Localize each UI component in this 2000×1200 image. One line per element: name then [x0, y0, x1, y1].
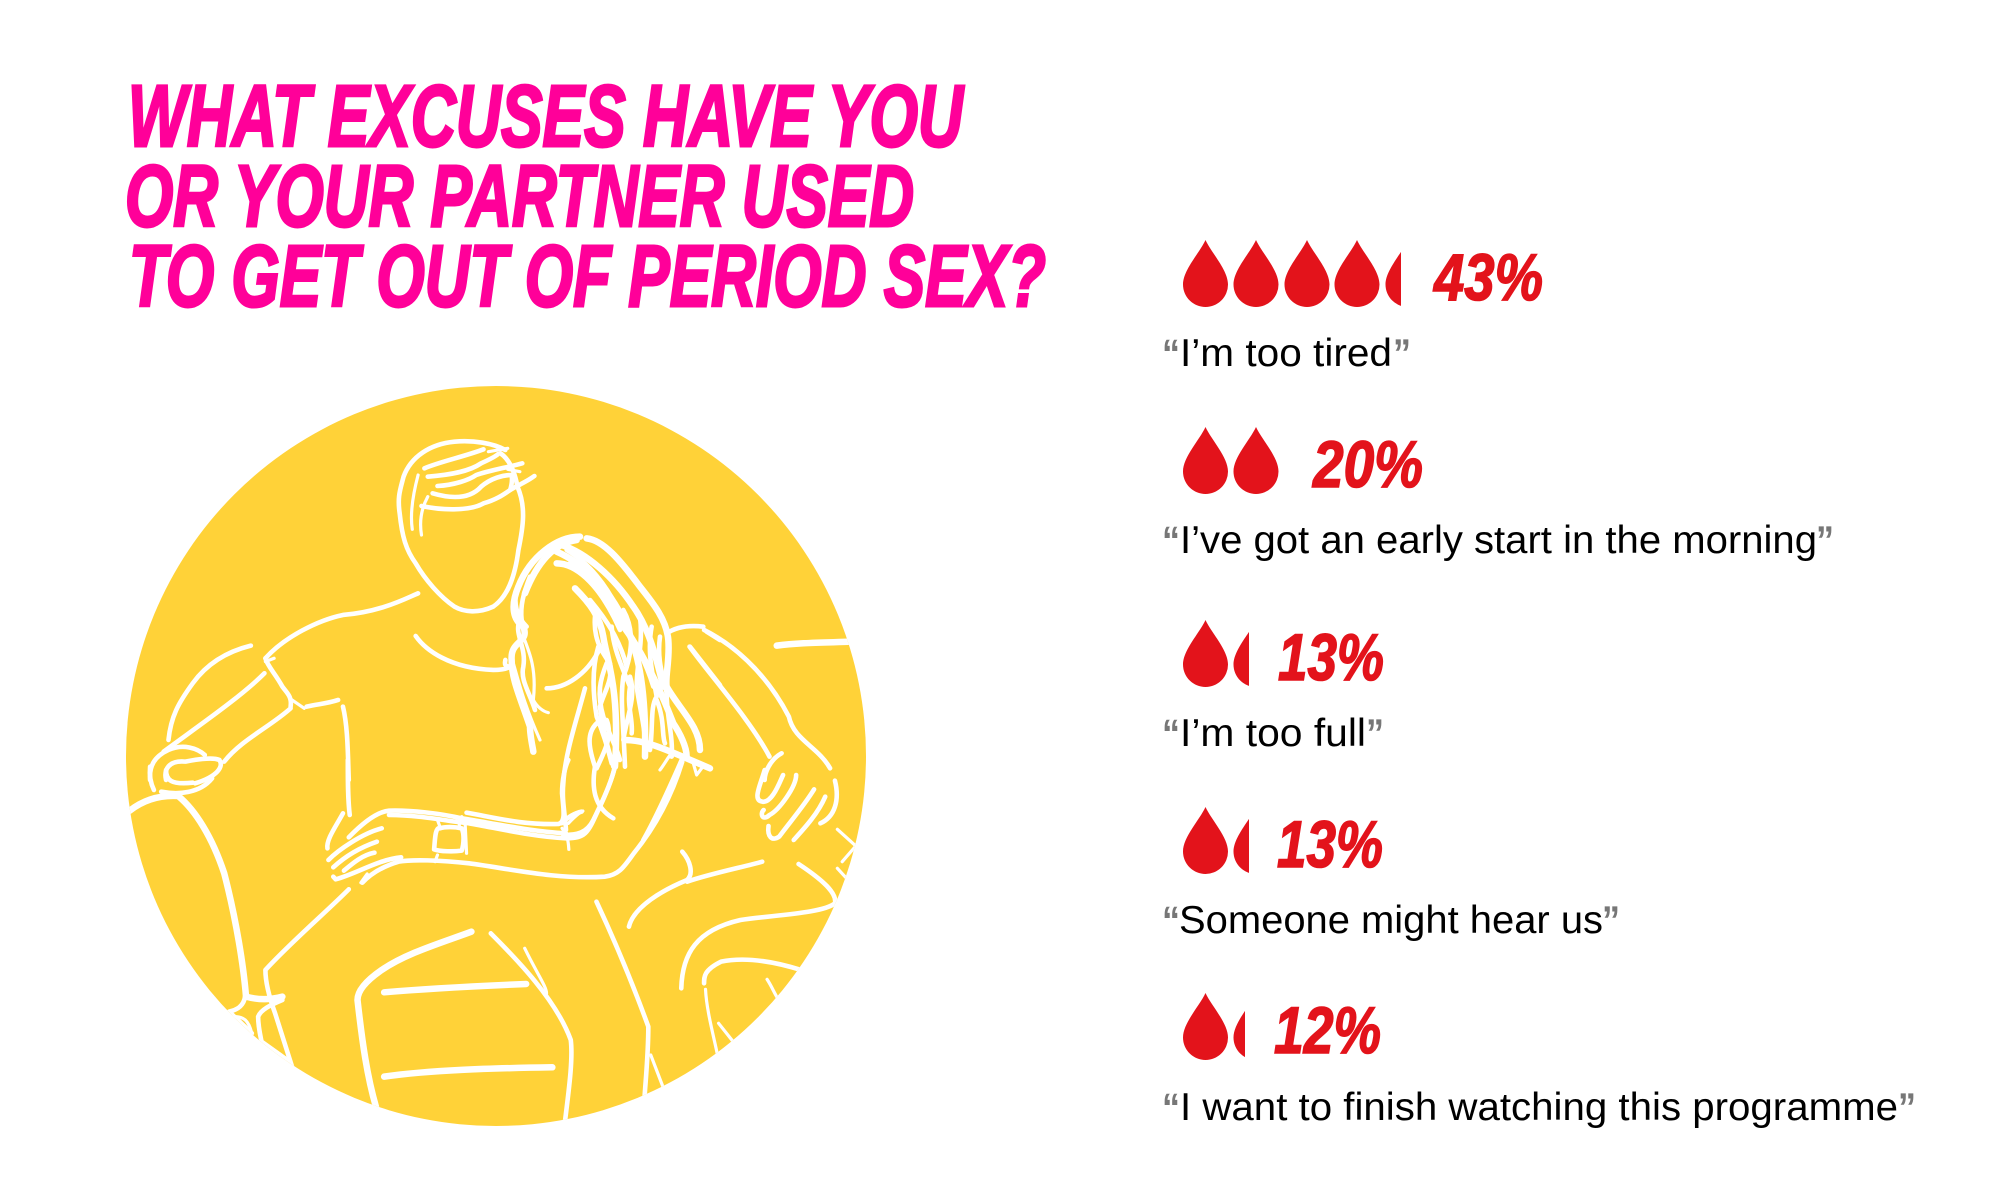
quote: I'm too tired: I’m too tired [1180, 332, 1392, 375]
quote: early start: ” [1816, 519, 1834, 563]
row: I'm too tired 43% [1162, 240, 1543, 376]
row: early start 20% [1162, 427, 1834, 563]
quote: early start: “ [1162, 519, 1180, 563]
quote: finish watching: I want to finish watching this programme [1180, 1086, 1898, 1129]
title: TO GET OUT OF PERIOD SEX? [129, 228, 1046, 325]
quote: too full: ” [1366, 712, 1384, 756]
percentage: 12%: 12% [1274, 993, 1381, 1067]
icon: 4.3 blood drops [1183, 240, 1401, 307]
percentage: 20%: 20% [1311, 427, 1423, 501]
line art: woman's hair [512, 537, 720, 840]
row: I'm too full 13% [1162, 620, 1384, 756]
percentage: 13%: 13% [1277, 807, 1383, 881]
quote: I'm too tired: ” [1393, 332, 1411, 376]
icon: 2 blood drops [1183, 427, 1278, 494]
quote: early start: I’ve got an early start in the morning [1180, 519, 1817, 562]
percentage: 13%: 13% [1278, 620, 1384, 694]
line art: lower bodies and sofa [130, 760, 856, 1122]
quote: too full: “ [1162, 712, 1180, 756]
quote: finish watching: ” [1898, 1086, 1916, 1130]
quote: too full: I’m too full [1180, 712, 1366, 755]
quote: someone might hear us: Someone might hear us [1179, 899, 1603, 942]
percentage: 43%: 43% [1432, 240, 1543, 314]
illustration: couple on sofa in yellow circle [126, 386, 866, 1126]
row: finish watching programme 12% [1162, 993, 1916, 1130]
row: Someone might hear us 13% [1162, 807, 1620, 943]
title: WHAT EXCUSES HAVE YOU [128, 68, 965, 165]
icon: 1.3 blood drops [1183, 620, 1249, 687]
quote: someone might hear us: ” [1602, 899, 1620, 943]
icon: 1.2 blood drops [1183, 993, 1245, 1060]
line art: man upper body [150, 441, 852, 780]
quote: finish watching: “ [1162, 1086, 1180, 1130]
title [125, 68, 1046, 325]
quote: someone might hear us: “ [1162, 899, 1180, 943]
icon: 1.3 blood drops [1183, 807, 1249, 874]
title: OR YOUR PARTNER USED [125, 148, 914, 245]
quote: I'm too tired: “ [1162, 332, 1180, 376]
